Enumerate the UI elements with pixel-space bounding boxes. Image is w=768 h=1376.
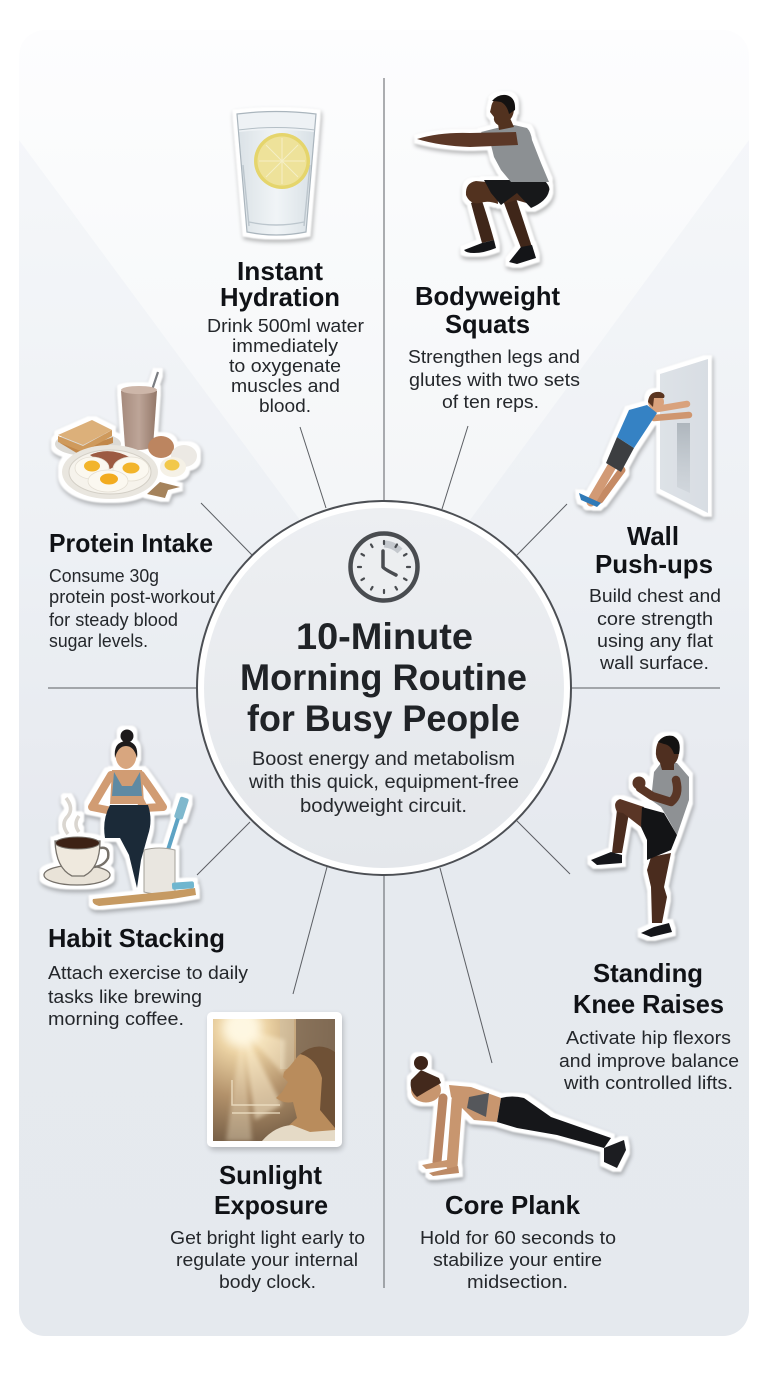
heading: Sunlight	[219, 1160, 322, 1190]
icon: sunlit face photo	[207, 1010, 343, 1150]
text block: Drink 500ml water	[207, 316, 364, 336]
text block	[207, 316, 364, 416]
text block: sugar levels.	[49, 631, 148, 651]
text block: midsection.	[467, 1272, 568, 1292]
heading: Instant	[237, 256, 323, 286]
text block	[49, 566, 215, 651]
panel: Habit Stacking	[44, 730, 248, 1029]
text block	[589, 586, 721, 673]
text block: regulate your internal	[176, 1250, 358, 1270]
text block: Build chest and	[589, 586, 721, 606]
heading: Push-ups	[595, 549, 713, 579]
icon: man pushing against wall	[579, 359, 708, 513]
text block	[420, 1228, 616, 1292]
panel: Standing Knee Raises	[559, 736, 739, 1093]
text block: wall surface.	[599, 653, 709, 673]
text block: and improve balance	[559, 1051, 739, 1071]
panel: Protein Intake	[49, 372, 215, 651]
text block: to oxygenate	[229, 356, 341, 376]
text block: stabilize your entire	[433, 1250, 602, 1270]
title: for Busy People	[247, 698, 520, 739]
text block: for steady blood	[49, 610, 178, 630]
panel: Sunlight Exposure	[170, 1010, 365, 1292]
subtitle: with this quick, equipment-free	[248, 772, 519, 793]
heading: Core Plank	[445, 1190, 581, 1220]
panel: Wall Push-ups	[579, 359, 721, 673]
heading: Hydration	[220, 282, 340, 312]
heading: Bodyweight	[415, 281, 560, 311]
text block: tasks like brewing	[48, 987, 202, 1007]
text block: blood.	[259, 396, 311, 416]
heading	[573, 958, 724, 1019]
text block: Hold for 60 seconds to	[420, 1228, 616, 1248]
text block: Consume 30g	[49, 566, 159, 586]
heading: Wall	[627, 521, 679, 551]
title: 10-Minute	[296, 616, 473, 657]
text block: with controlled lifts.	[563, 1073, 733, 1093]
title	[240, 616, 527, 739]
subtitle: Boost energy and metabolism	[252, 749, 515, 770]
heading	[595, 521, 713, 579]
connector lines	[48, 78, 720, 1288]
text block	[408, 347, 580, 412]
heading: Squats	[445, 309, 530, 339]
heading: Standing	[593, 958, 703, 988]
text block: Activate hip flexors	[566, 1028, 731, 1048]
icon: clock	[350, 534, 418, 600]
text block: Get bright light early to	[170, 1228, 365, 1248]
text block	[170, 1228, 365, 1292]
text block	[48, 963, 248, 1029]
icon: glass of water with lemon	[237, 112, 316, 235]
subtitle: bodyweight circuit.	[300, 796, 467, 817]
icon: man raising knee	[591, 736, 689, 937]
panel: Core Plank	[411, 1056, 626, 1292]
heading: Habit Stacking	[48, 923, 225, 953]
text block: Strengthen legs and	[408, 347, 580, 367]
heading: Exposure	[214, 1190, 328, 1220]
text block: glutes with two sets	[409, 370, 580, 390]
heading: Knee Raises	[573, 989, 724, 1019]
text block: Attach exercise to daily	[48, 963, 248, 983]
icon: protein breakfast	[55, 372, 197, 499]
icon: woman in plank	[411, 1056, 626, 1176]
text block: muscles and	[231, 376, 340, 396]
text block: of ten reps.	[442, 392, 539, 412]
title: Morning Routine	[240, 657, 527, 698]
panel: central hub	[197, 501, 571, 875]
subtitle	[248, 749, 519, 817]
text block: morning coffee.	[48, 1009, 184, 1029]
text block: protein post-workout	[49, 587, 215, 607]
text block: immediately	[232, 336, 338, 356]
heading	[415, 281, 560, 339]
panel: Bodyweight Squats	[408, 95, 580, 412]
icon: woman with coffee and toothbrush	[44, 730, 196, 906]
text block: body clock.	[219, 1272, 316, 1292]
text block: core strength	[597, 609, 713, 629]
heading	[220, 256, 340, 312]
heading	[214, 1160, 328, 1220]
heading: Protein Intake	[49, 528, 213, 558]
text block: using any flat	[597, 631, 713, 651]
panel: Instant Hydration	[207, 112, 364, 416]
text block	[559, 1028, 739, 1093]
icon: man squatting	[417, 95, 549, 264]
